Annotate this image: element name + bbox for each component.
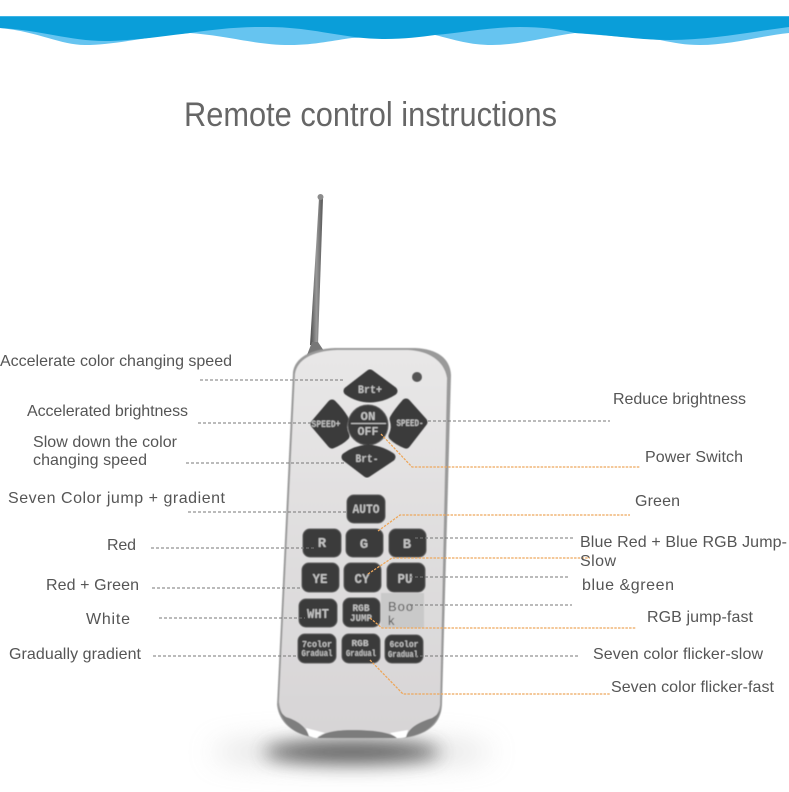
button: 7color Gradual xyxy=(298,634,336,663)
header wave band xyxy=(0,16,789,45)
indicator light xyxy=(412,372,422,382)
button: AUTO: AUTO xyxy=(352,503,380,517)
label: slow down the color changing speed: changing speed xyxy=(33,452,147,469)
direction pad xyxy=(312,374,424,473)
label: accelerated brightness: Accelerated brightness xyxy=(27,403,188,420)
stray text box: Book: k xyxy=(388,613,395,628)
label: red: Red xyxy=(107,537,136,554)
label: slow down the color changing speed: Slow down the color xyxy=(33,434,178,451)
button: R: R xyxy=(318,536,327,552)
right labels xyxy=(580,391,787,696)
label: blue red + blue RGB jump-slow: Blue Red + Blue RGB Jump- xyxy=(580,534,787,551)
label: green: Green xyxy=(635,493,680,510)
button: ON/OFF xyxy=(348,405,388,445)
button: SPEED-: SPEED- xyxy=(396,418,424,430)
button: B: B xyxy=(403,537,412,553)
label: seven color flicker-fast: Seven color flicker-fast xyxy=(611,679,775,696)
button: 6color Gradual: 6color xyxy=(390,639,419,650)
label: reduce brightness: Reduce brightness xyxy=(613,391,746,408)
label: gradually gradient: Gradually gradient xyxy=(9,646,142,663)
button: WHT: WHT xyxy=(307,608,329,623)
antenna xyxy=(307,194,324,355)
title: Remote control instructions xyxy=(184,96,557,134)
label: blue red + blue RGB jump-slow xyxy=(580,534,787,570)
button: PU: PU xyxy=(398,572,412,588)
orange leader lines xyxy=(368,434,640,694)
button: RGB JUMP: JUMP xyxy=(350,613,372,625)
button: ON/OFF: ON xyxy=(360,410,376,424)
button: RGB Gradual: RGB xyxy=(352,638,369,649)
button: SPEED+: SPEED+ xyxy=(312,419,340,431)
label: seven color jump + gradient: Seven Color jump + gradient xyxy=(8,490,226,507)
label: seven color flicker-slow: Seven color flicker-slow xyxy=(593,646,763,663)
button: ON/OFF: OFF xyxy=(358,425,378,439)
button: YE: YE xyxy=(312,572,328,588)
label: blue and green: blue &green xyxy=(582,577,674,594)
left labels xyxy=(0,353,232,663)
button: 7color Gradual: 7color xyxy=(302,639,332,650)
stray text box: Book xyxy=(381,593,424,628)
button: RGB JUMP: RGB xyxy=(352,603,370,615)
button: 6color Gradual: Gradual xyxy=(388,649,418,660)
label: blue red + blue RGB jump-slow: Slow xyxy=(580,553,616,570)
button: Brt-: Brt- xyxy=(356,454,378,466)
button grid xyxy=(298,529,426,663)
label: accelerate color changing speed: Accelerate color changing speed xyxy=(0,353,232,370)
button: RGB Gradual xyxy=(342,634,380,663)
remote body xyxy=(277,348,451,738)
button: Brt+: Brt+ xyxy=(358,385,382,397)
button: CY: CY xyxy=(354,572,370,588)
button: RGB JUMP xyxy=(343,598,380,627)
label: red + green: Red + Green xyxy=(46,577,139,594)
stray text box: Book: Boo xyxy=(388,599,414,614)
button: RGB Gradual: Gradual xyxy=(346,648,376,659)
button: 6color Gradual xyxy=(385,635,423,663)
button: AUTO xyxy=(347,495,385,523)
label: white: White xyxy=(86,611,130,628)
label: power switch: Power Switch xyxy=(645,449,743,466)
label: RGB jump-fast: RGB jump-fast xyxy=(647,609,754,626)
button: G: G xyxy=(360,537,368,553)
label: slow down the color changing speed xyxy=(33,434,178,469)
remote shadow xyxy=(212,740,492,764)
grey leader lines xyxy=(151,380,610,656)
button: 7color Gradual: Gradual xyxy=(302,648,333,659)
